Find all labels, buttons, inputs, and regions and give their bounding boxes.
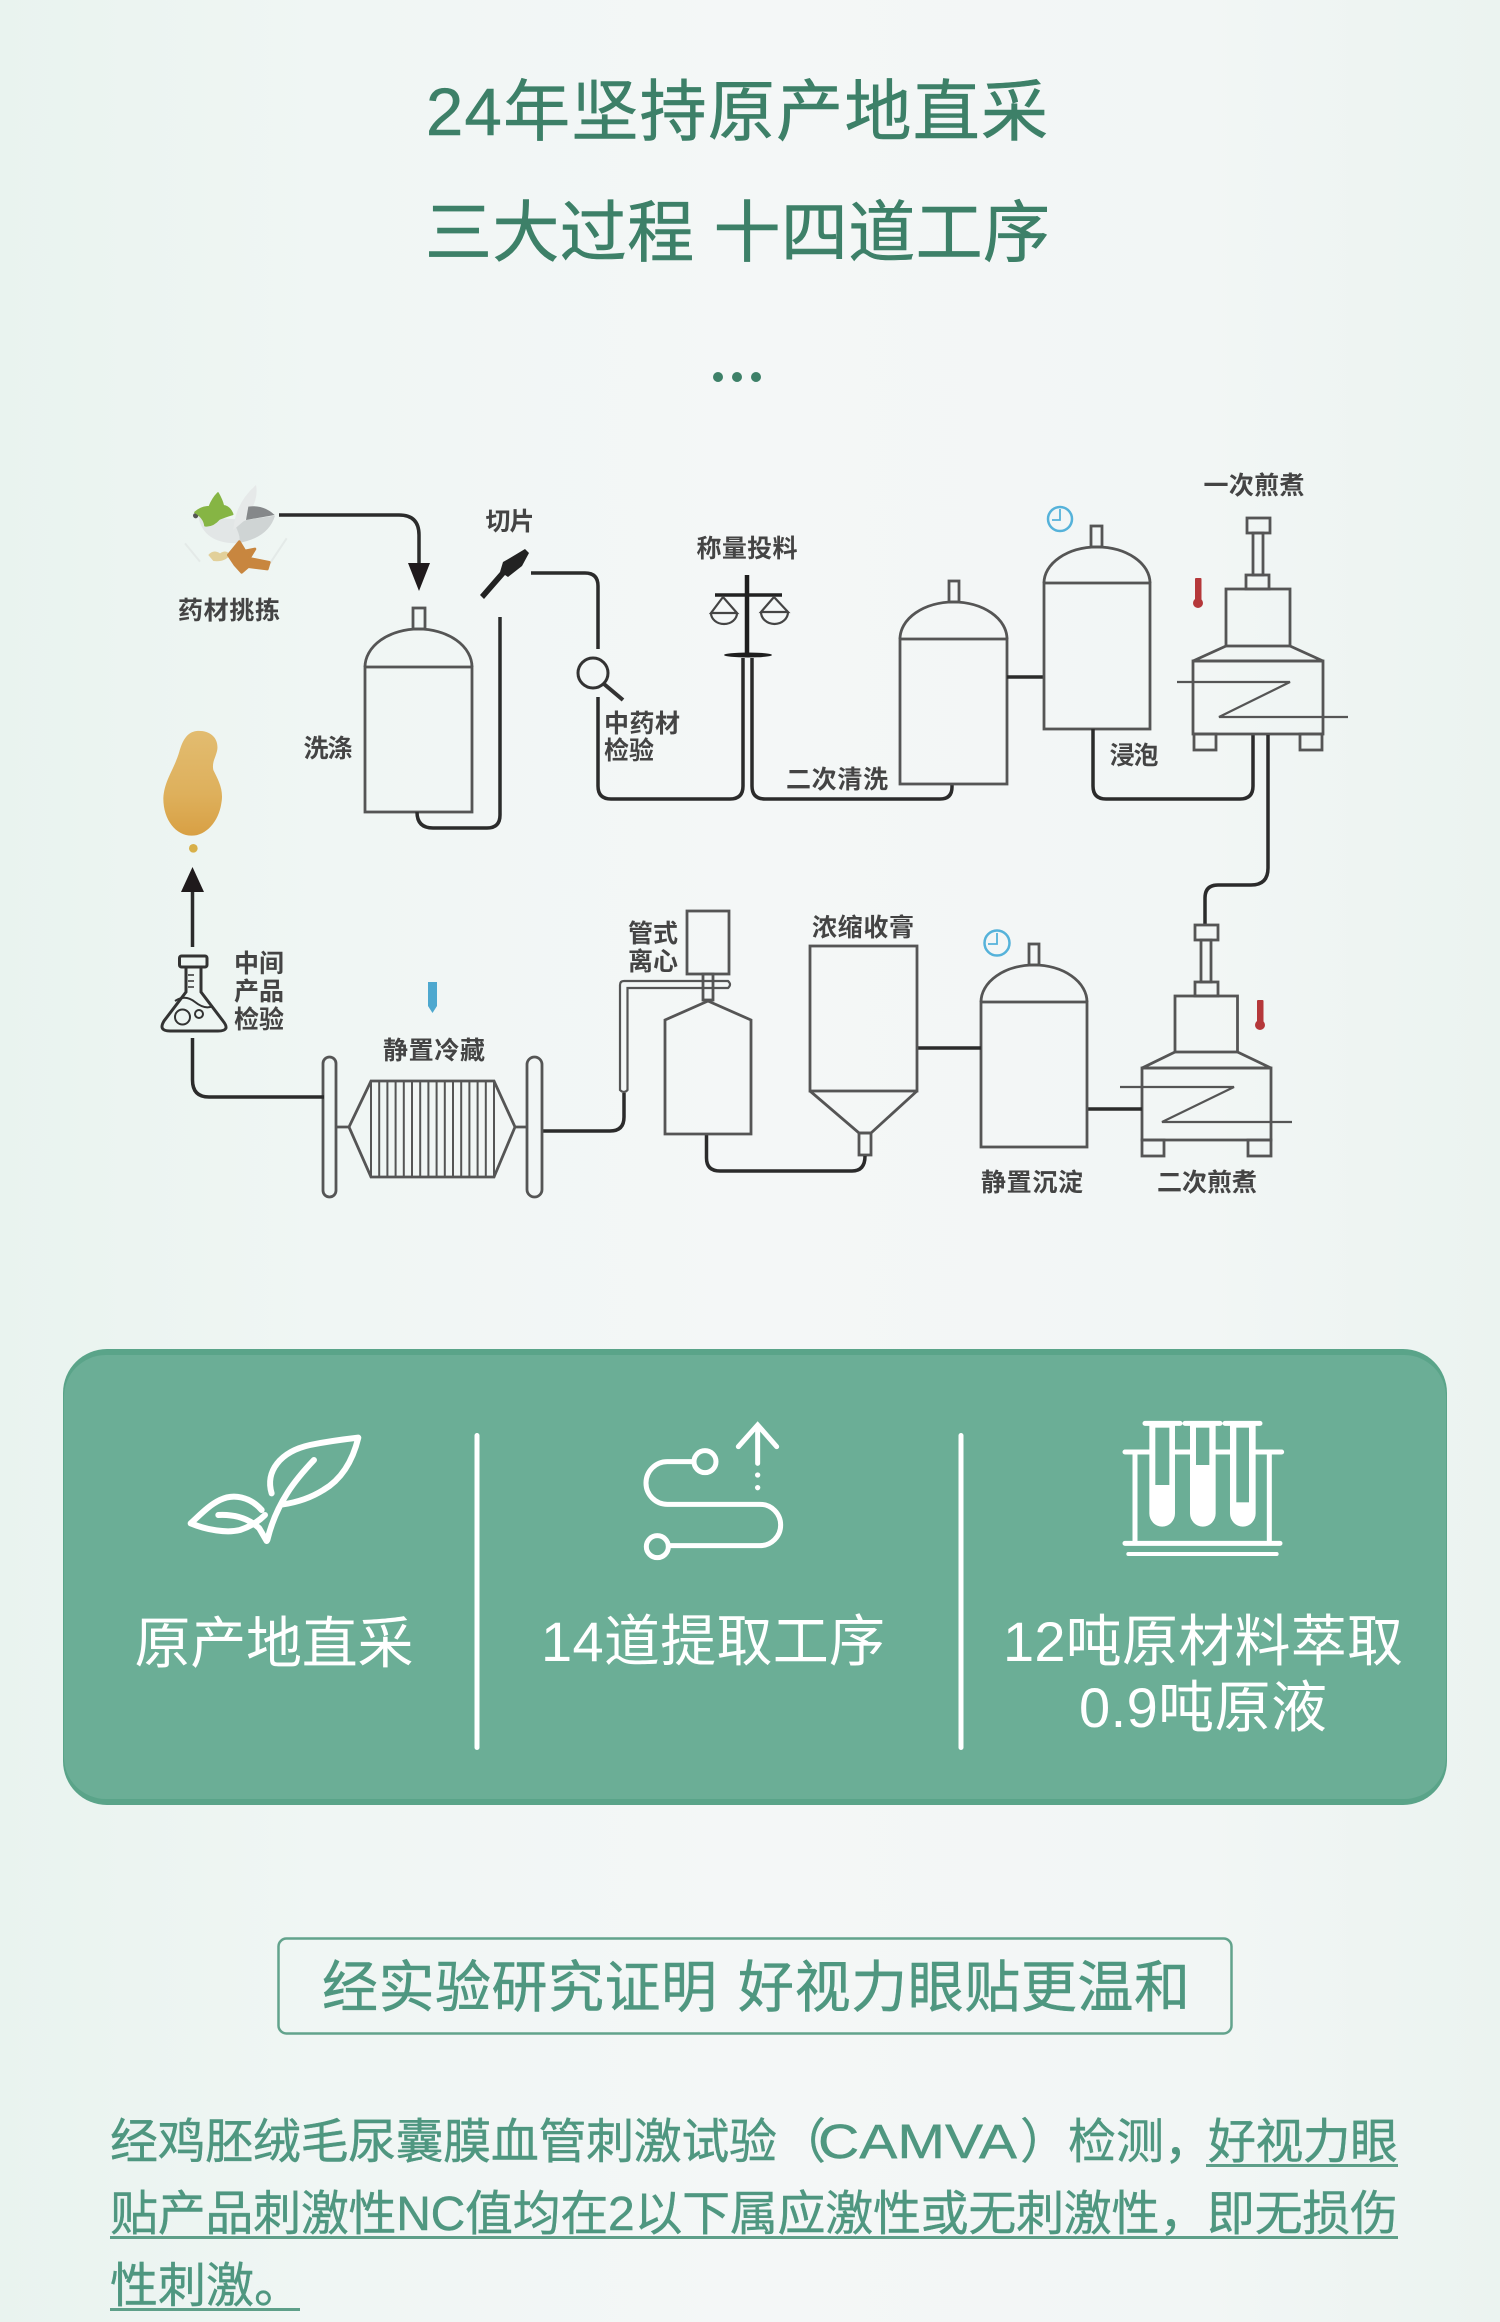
- boiler: 一次煎煮: [1177, 518, 1348, 750]
- pipe: wash tank to slicer: [417, 617, 500, 828]
- pipe: hopper to centrifuge tank: [706, 1134, 865, 1171]
- label: 切片: 切片: [486, 508, 534, 536]
- icon: mortar with herbs: [185, 485, 287, 572]
- pipe: settling tank to hopper: [917, 1046, 981, 1050]
- body line 3: 性刺激。: [110, 2260, 302, 2313]
- label: 中间产品检验: 中间: [234, 950, 284, 978]
- process flow diagram: [162, 472, 1348, 1197]
- text: 12吨原材料萃取: 12吨原材料萃取: [1003, 1610, 1403, 1673]
- icon: blue thermometer: [428, 982, 437, 1013]
- label: 称量投料: 称量投料: [696, 535, 798, 563]
- label: 中间产品检验: 产品: [234, 978, 284, 1006]
- cold filter: 静置冷藏: [323, 1057, 542, 1197]
- callout text: 好视力眼贴更温和: [738, 1956, 1190, 2019]
- label: 管式离心: 管式: [628, 920, 678, 948]
- label: 浓缩收膏: 浓缩收膏: [812, 913, 914, 942]
- divider left: [474, 1433, 480, 1750]
- callout text: 经实验研究证明: [322, 1956, 717, 2019]
- label: 管式离心: 离心: [628, 948, 678, 976]
- label: 洗涤: 洗涤: [304, 735, 352, 763]
- icon: clock 2: [984, 930, 1010, 956]
- tank: 洗涤: [365, 608, 472, 812]
- underlines: [110, 2166, 1398, 2310]
- label: 药材挑拣: 药材挑拣: [178, 597, 280, 625]
- body line 2: 贴产品刺激性NC值均在2以下属应激性或无刺激性，即无损伤: [110, 2188, 1398, 2241]
- tank: 浸泡: [1044, 526, 1150, 729]
- icon: balance scale: [711, 575, 788, 658]
- icon: clock: [1048, 507, 1072, 531]
- icon: extract drop: [163, 731, 222, 853]
- label: 中间产品检验: [234, 950, 284, 1034]
- pipe: magnifier to scale: [598, 658, 743, 799]
- body line 1: ）: [1020, 2116, 1068, 2169]
- label: 浸泡: 浸泡: [1110, 742, 1158, 770]
- pipe: second boiler to settling tank: [1087, 1107, 1142, 1111]
- label: 中药材检验: 中药材: [604, 710, 680, 738]
- callout text: [322, 1956, 1190, 2019]
- pipe: first boiler to second boiler: [1205, 735, 1268, 925]
- icon: test tubes: [1125, 1423, 1282, 1554]
- text: 0.9吨原液: 0.9吨原液: [1079, 1676, 1327, 1739]
- pipe: cold filter to flask: [192, 1038, 324, 1097]
- dots decoration: [713, 372, 761, 382]
- label: 中药材检验: 检验: [604, 737, 654, 765]
- icon: red thermometer 2: [1255, 1000, 1265, 1030]
- icon: conical flask: [162, 956, 226, 1031]
- body line 1: 检测，: [1068, 2116, 1212, 2169]
- body line 1: [110, 2116, 1398, 2169]
- body line 1: 经鸡胚绒毛尿囊膜血管刺激试验: [110, 2116, 777, 2169]
- text block: test result: [110, 2116, 1398, 2313]
- arrow: flask to product: [181, 867, 204, 947]
- label: 二次清洗: 二次清洗: [786, 766, 888, 794]
- label: 管式离心: [628, 920, 678, 976]
- tank: 静置沉淀: [981, 944, 1087, 1147]
- hopper: 浓缩收膏: [810, 946, 917, 1155]
- body line 1: 好视力眼: [1208, 2116, 1398, 2169]
- pipe: centrifuge to cold filter: [542, 1093, 624, 1131]
- body line 1: （: [778, 2116, 826, 2169]
- pipe: soak tank to first boiler: [1093, 729, 1253, 799]
- pipe: rinse to soak tank: [1007, 675, 1044, 679]
- label: 静置冷藏: 静置冷藏: [383, 1037, 485, 1065]
- label: 二次煎煮: 二次煎煮: [1157, 1169, 1257, 1197]
- title: [425, 75, 1050, 271]
- tank: 二次清洗: [900, 581, 1007, 784]
- label: 中药材检验: [604, 710, 680, 765]
- icon: route with arrow: [646, 1425, 781, 1558]
- text: 原产地直采: 原产地直采: [134, 1612, 414, 1675]
- callout box: [278, 1938, 1232, 2034]
- label: 中间产品检验: 检验: [234, 1006, 284, 1034]
- divider right: [958, 1433, 964, 1750]
- body line 1: CAMVA: [818, 2116, 1017, 2169]
- pipe: slicer to magnifier: [531, 573, 598, 649]
- title line 2: 三大过程 十四道工序: [425, 196, 1050, 271]
- text: 14道提取工序: 14道提取工序: [541, 1610, 885, 1673]
- centrifuge tank: [620, 911, 751, 1134]
- title line 1: 24年坚持原产地直采: [426, 75, 1048, 150]
- label: 静置沉淀: 静置沉淀: [981, 1169, 1083, 1197]
- label: 一次煎煮: 一次煎煮: [1204, 472, 1304, 500]
- icon: magnifier: [578, 658, 623, 700]
- panel: three highlights: [63, 1349, 1447, 1805]
- pipe: scale to rinse tank: [752, 658, 952, 799]
- icon: knife: [480, 549, 529, 599]
- arrow: herbs to wash tank: [279, 515, 430, 591]
- boiler: 二次煎煮: [1120, 925, 1292, 1156]
- icon: leaf: [191, 1438, 358, 1541]
- icon: red thermometer: [1193, 578, 1203, 608]
